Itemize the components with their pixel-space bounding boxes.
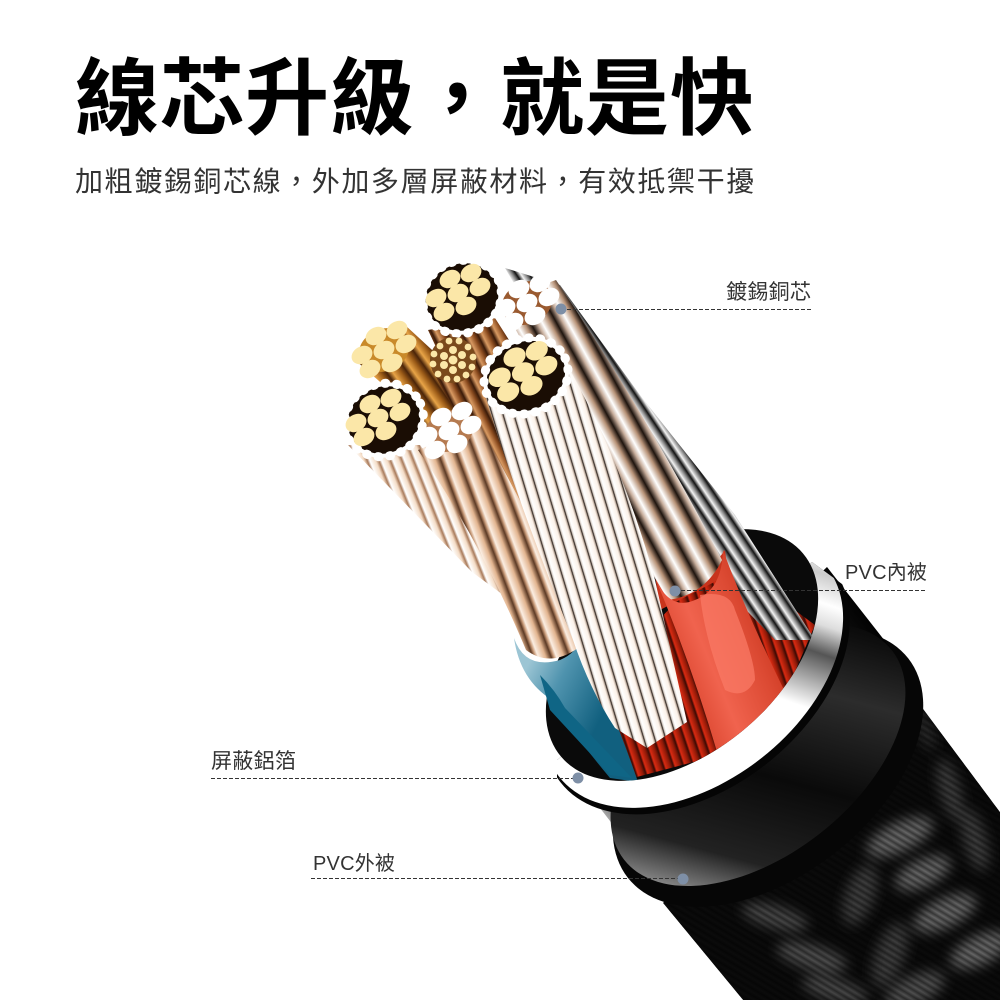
label: tinned copper core: 鍍錫銅芯 — [726, 281, 811, 304]
front silver bundle — [485, 370, 687, 748]
outer lip of braid — [561, 573, 975, 963]
lower white bundle — [418, 425, 578, 659]
leader: PVC inner sheath — [670, 586, 927, 596]
cable illustration — [211, 263, 1000, 1000]
braided sleeve — [663, 709, 1000, 1000]
face: gold left bundle — [348, 317, 420, 382]
left silver bundle — [348, 445, 500, 593]
face: front silver bundle — [471, 324, 581, 428]
back silver wires — [500, 280, 722, 600]
PVC outer jacket collar — [562, 567, 954, 938]
red inner fan — [619, 581, 815, 777]
leader: tinned copper — [556, 304, 811, 314]
face: lower white bundle — [413, 398, 485, 463]
cable opening interior — [499, 479, 865, 831]
copper top bundle — [428, 318, 509, 368]
subtitle: 加粗鍍錫銅芯線，外加多層屏蔽材料，有效抵禦干擾 — [75, 166, 756, 197]
face: centre fine bundle — [430, 337, 476, 383]
face: left silver bundle — [333, 370, 435, 470]
gold left bundle — [360, 327, 454, 427]
centre fine bundle body — [432, 370, 521, 502]
conductor bundles — [348, 268, 815, 782]
red insulated tube — [653, 550, 785, 755]
label: PVC outer sheath: PVC外被 — [313, 853, 395, 875]
face: top copper bundle — [411, 247, 513, 347]
title: 線芯升級，就是快 — [75, 52, 755, 146]
leader: PVC outer sheath — [311, 874, 688, 884]
label: PVC inner sheath: PVC內被 — [845, 562, 927, 584]
label: shielding aluminium foil: 屏蔽鋁箔 — [211, 750, 296, 773]
shielding foil chrome ring — [557, 562, 844, 808]
red tube back lip — [655, 550, 728, 610]
black lip behind chrome ring — [557, 562, 849, 814]
face: back white bundle — [491, 270, 563, 335]
rear grey wires — [505, 268, 815, 640]
leader: aluminium foil — [211, 772, 584, 784]
blue insulated tube — [514, 638, 638, 782]
